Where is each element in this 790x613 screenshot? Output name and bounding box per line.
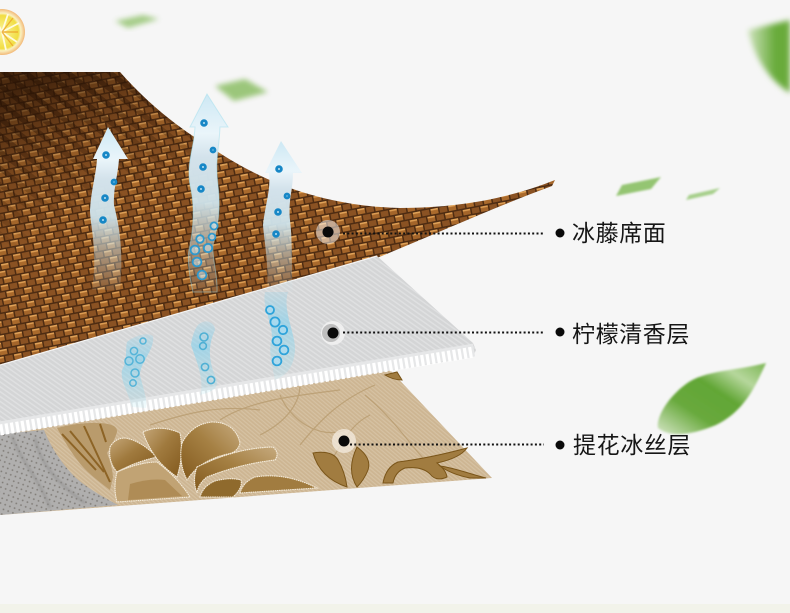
marker: rattan	[316, 220, 340, 244]
leaf: small top	[115, 15, 159, 28]
bullet: rattan	[556, 228, 564, 238]
leaf: near arrows	[215, 79, 268, 101]
water wisp: right	[264, 292, 295, 380]
bullet: lemon layer	[556, 328, 564, 336]
jacquard base	[0, 370, 492, 515]
serrated edge base	[0, 350, 474, 428]
rattan weave	[0, 72, 555, 367]
layer: gray mesh backing	[0, 430, 118, 515]
arrow: left airflow	[90, 127, 128, 290]
lemon layer highlight edge	[0, 256, 377, 365]
bottom strip	[0, 604, 790, 613]
label: jacquard ice silk layer: 提花冰丝层	[573, 432, 691, 458]
marker: jacquard layer	[332, 429, 356, 453]
bullet: jacquard layer	[556, 440, 564, 450]
leader line: rattan	[343, 232, 544, 234]
leader line: lemon layer	[343, 332, 544, 334]
right leaf motif	[313, 372, 486, 487]
lemon layer surface	[0, 256, 476, 435]
leaf: top right large	[748, 20, 790, 93]
water wisp: left	[122, 334, 153, 408]
rattan shading	[0, 72, 215, 260]
decorative leaves	[115, 15, 790, 434]
leaf: small right two	[686, 188, 720, 200]
arrow: middle airflow	[188, 94, 228, 292]
label: lemon fragrance layer: 柠檬清香层	[572, 321, 690, 347]
layer: jacquard ice silk	[0, 370, 492, 515]
leaf: big lower right	[658, 363, 766, 434]
label: rattan surface: 冰藤席面	[572, 220, 666, 246]
marker: lemon layer	[321, 321, 345, 345]
flower motif	[57, 422, 317, 502]
layer: rattan surface	[0, 72, 555, 367]
water wisp: middle	[191, 321, 217, 395]
arrow: right airflow	[263, 141, 302, 292]
layer: lemon fragrance	[0, 256, 476, 435]
leader line: jacquard layer	[350, 444, 544, 446]
icon: lemon slice	[0, 9, 25, 55]
serrated edge	[0, 352, 474, 430]
rattan dark ridges	[0, 72, 227, 252]
leaf: small right one	[616, 177, 661, 196]
vine line pattern	[150, 385, 425, 462]
